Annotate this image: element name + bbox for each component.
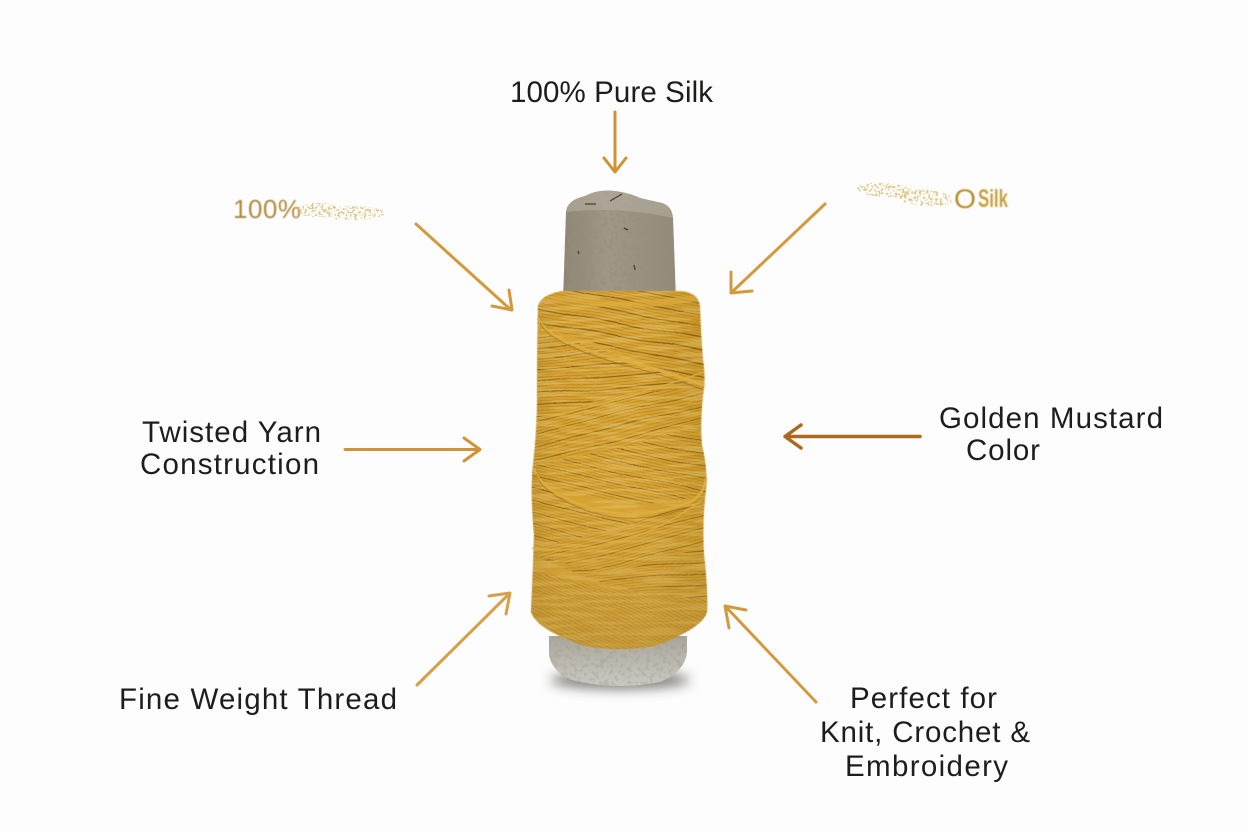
arrow: bottom right xyxy=(725,606,816,702)
label: Golden Mustard Color: Color xyxy=(966,434,1040,467)
arrow: top right xyxy=(731,204,825,293)
infographic: silk thread spool with callouts xyxy=(121,80,1162,782)
faded label: top right smudged text xyxy=(857,181,1008,214)
label: Perfect for Knit, Crochet & Embroidery: Perfect for xyxy=(850,682,997,715)
faded label: top left smudged text: 100% xyxy=(233,194,301,224)
spool base xyxy=(549,636,687,686)
arrow: top left xyxy=(416,224,512,310)
wrapped strand: upper xyxy=(538,318,704,386)
label: Twisted Yarn Construction xyxy=(140,416,321,481)
arrow: left middle xyxy=(345,438,480,461)
arrow: bottom left xyxy=(417,593,510,685)
spool illustration xyxy=(520,185,720,689)
label: Twisted Yarn Construction: Twisted Yarn xyxy=(142,416,321,449)
label: Perfect for Knit, Crochet & Embroidery xyxy=(820,682,1030,783)
faded label: top right smudged text: Silk xyxy=(978,185,1008,213)
spool cone top xyxy=(563,190,676,292)
label: Perfect for Knit, Crochet & Embroidery: Knit, Crochet & xyxy=(820,716,1030,749)
label: Perfect for Knit, Crochet & Embroidery: Embroidery xyxy=(845,750,1008,783)
label: Fine Weight Thread: Fine Weight Thread xyxy=(119,683,397,716)
arrow: top label to spool xyxy=(604,112,626,172)
faded label: top left smudged text xyxy=(233,194,385,224)
title label: 100% Pure Silk: 100% Pure Silk xyxy=(510,76,713,109)
label: Twisted Yarn Construction: Construction xyxy=(140,448,319,481)
faded label: top right smudged text: O xyxy=(954,184,976,214)
spool shadow xyxy=(550,671,690,689)
thread body xyxy=(530,290,708,650)
label: Golden Mustard Color xyxy=(939,402,1163,467)
arrow: right middle xyxy=(785,425,920,448)
wrapped strand: lower xyxy=(534,468,706,514)
label: Golden Mustard Color: Golden Mustard xyxy=(939,402,1163,435)
